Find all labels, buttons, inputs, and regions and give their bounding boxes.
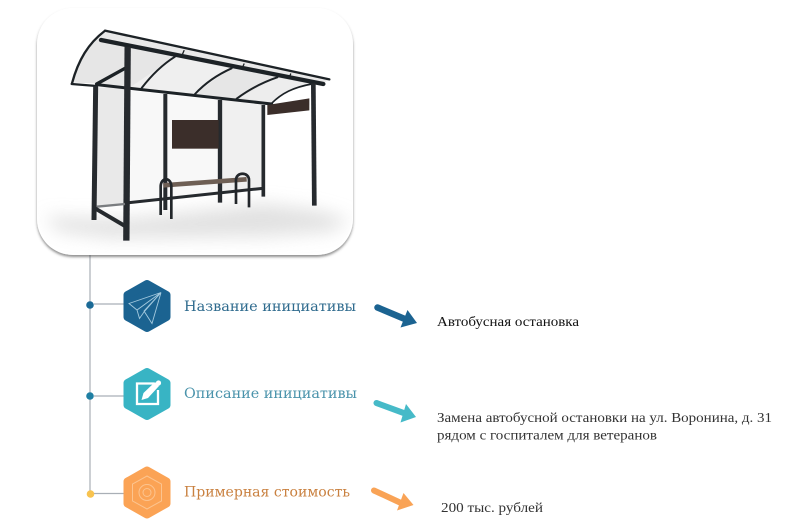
heading: Описание инициативы	[184, 386, 357, 402]
ground shadow	[43, 203, 350, 238]
roof glass	[73, 32, 327, 103]
back glass panels	[97, 87, 127, 207]
bench	[161, 174, 249, 219]
row 2: description of initiative	[86, 372, 775, 444]
value text: рядом с госпиталем для ветеранов	[437, 428, 657, 444]
roof light strip	[101, 31, 329, 83]
heading: Название инициативы	[184, 299, 356, 315]
illustration: bus stop shelter	[72, 31, 329, 241]
heading: Примерная стоимость	[184, 484, 350, 500]
timeline dot: blue	[86, 301, 94, 309]
arrow	[376, 403, 416, 422]
icon: pencil on note	[128, 372, 166, 416]
timeline vertical line	[89, 255, 91, 494]
arrow	[378, 308, 417, 328]
icon: coin	[128, 470, 166, 514]
timeline dot: teal	[86, 392, 94, 400]
panel: bus stop photo card	[37, 8, 353, 255]
value text: 200 тыс. рублей	[441, 501, 544, 516]
row 1: name of initiative	[86, 284, 580, 330]
value text: Замена автобусной остановки на ул. Воронина, д. 31	[437, 411, 772, 426]
roof frame	[72, 31, 329, 104]
roadside sign	[267, 98, 309, 115]
row 3: estimated cost	[87, 470, 544, 516]
card background	[37, 8, 353, 255]
timeline dot: yellow	[87, 490, 94, 498]
value text: Автобусная остановка	[437, 315, 580, 330]
arrow	[374, 490, 414, 510]
icon: paper plane	[128, 284, 166, 328]
information board	[172, 120, 219, 149]
posts	[94, 47, 314, 241]
